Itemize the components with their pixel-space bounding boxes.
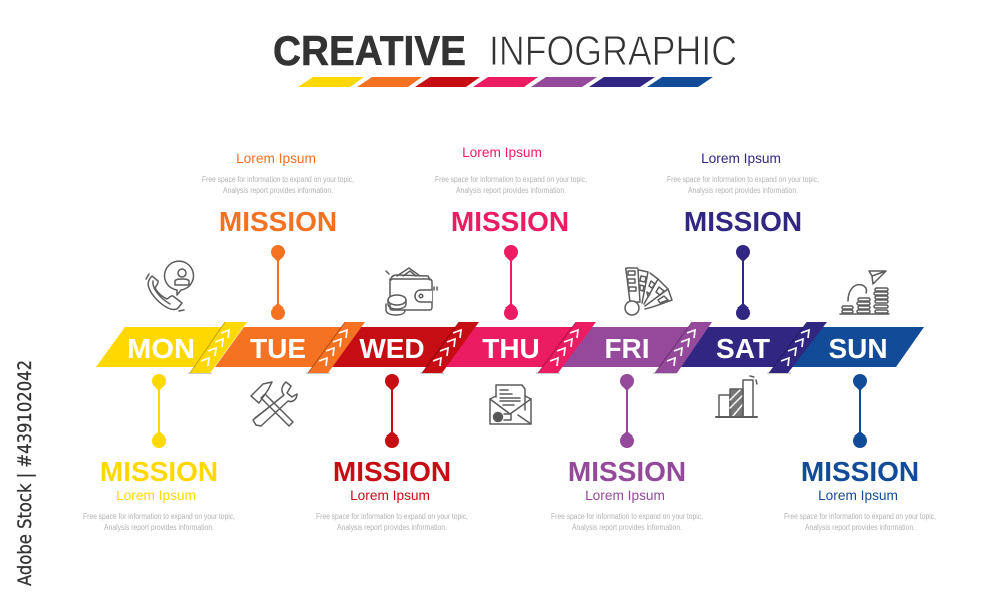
fold: TUE to WED (306, 322, 365, 374)
pin: MON (152, 374, 166, 448)
fold: WED to THU (420, 322, 479, 374)
day labels: MON (127, 333, 195, 364)
description: WED: Free space for information to expand on your topic, (316, 512, 468, 521)
pin: THU (504, 245, 518, 320)
band: SAT (678, 327, 822, 367)
description: THU: Analysis report provides information. (456, 186, 566, 195)
description: TUE: Analysis report provides information. (223, 186, 333, 195)
band: WED (330, 327, 474, 367)
pin: SAT (736, 245, 750, 320)
subheading: MON: Lorem Ipsum (116, 488, 196, 503)
subheading: TUE: Lorem Ipsum (236, 151, 316, 166)
description: WED: Analysis report provides information. (337, 523, 447, 532)
description: FRI: Free space for information to expand on your topic, (551, 512, 703, 521)
description: SUN: Free space for information to expand on your topic, (784, 512, 936, 521)
day labels: THU (482, 333, 540, 364)
description: SAT (667, 175, 819, 195)
description: SAT: Analysis report provides information. (688, 186, 798, 195)
panel: TUE mission (202, 151, 354, 320)
ribbon timeline (96, 322, 924, 374)
day labels: SUN (828, 333, 888, 364)
band: THU (444, 327, 590, 367)
subheading: SUN: Lorem Ipsum (818, 488, 898, 503)
description: SUN: Analysis report provides information. (805, 523, 915, 532)
icon: bar chart (716, 376, 757, 417)
band: TUE (215, 327, 358, 367)
pin: TUE (271, 245, 285, 320)
panel: MON mission (83, 374, 235, 532)
pin: FRI (620, 374, 634, 448)
description: THU (435, 175, 587, 195)
day labels (127, 333, 888, 364)
title: CREATIVE (273, 27, 466, 74)
subheading: FRI: Lorem Ipsum (585, 488, 665, 503)
day labels: SAT (716, 333, 770, 364)
title colour bar (298, 77, 713, 87)
heading: THU mission: MISSION (451, 206, 569, 237)
description: SAT: Free space for information to expand on your topic, (667, 175, 819, 184)
fold: FRI to SAT (653, 322, 712, 374)
panel: THU mission (435, 145, 587, 320)
day labels: FRI (604, 333, 650, 364)
stock credit label: Adobe Stock | #439102042 (14, 360, 36, 586)
icon: wallet with coins (386, 268, 437, 315)
description: MON: Free space for information to expand on your topic, (83, 512, 235, 521)
band: SUN (793, 327, 924, 367)
description: SUN (784, 512, 936, 532)
panel: WED mission (316, 374, 468, 532)
icon: phone and contact bubble (146, 261, 194, 311)
panel: SAT mission (667, 151, 819, 320)
heading: FRI mission: MISSION (568, 456, 686, 487)
panel: FRI mission (551, 374, 703, 532)
icon: coin stacks and paper plane (840, 271, 889, 314)
pin: WED (385, 374, 399, 448)
icon: open envelope with letter (490, 385, 531, 424)
description: MON (83, 512, 235, 532)
description: TUE: Free space for information to expand on your topic, (202, 175, 354, 184)
subheading: THU: Lorem Ipsum (462, 145, 542, 160)
heading: SUN mission: MISSION (801, 456, 919, 487)
description: FRI (551, 512, 703, 532)
description: MON: Analysis report provides information. (104, 523, 214, 532)
description: FRI: Analysis report provides information. (572, 523, 682, 532)
subheading: SAT: Lorem Ipsum (701, 151, 781, 166)
description: WED (316, 512, 468, 532)
heading: TUE mission: MISSION (219, 206, 337, 237)
fold: THU to FRI (536, 322, 596, 374)
icon: hammer and wrench (251, 382, 297, 426)
subheading: WED: Lorem Ipsum (350, 488, 430, 503)
description: TUE (202, 175, 354, 195)
heading: SAT mission: MISSION (684, 206, 802, 237)
fold: SAT to SUN (767, 322, 827, 374)
band: FRI (560, 327, 706, 367)
day labels: WED (359, 333, 425, 364)
description: THU: Free space for information to expand on your topic, (435, 175, 587, 184)
day labels: TUE (250, 333, 306, 364)
heading: WED mission: MISSION (333, 456, 451, 487)
icon: colour swatch fan (625, 268, 672, 315)
fold: MON to TUE (188, 322, 247, 374)
title (273, 27, 737, 74)
band: MON (96, 327, 240, 367)
pin: SUN (853, 374, 867, 448)
title: INFOGRAPHIC (489, 27, 737, 74)
panel: SUN mission (784, 374, 936, 532)
heading: MON mission: MISSION (100, 456, 218, 487)
